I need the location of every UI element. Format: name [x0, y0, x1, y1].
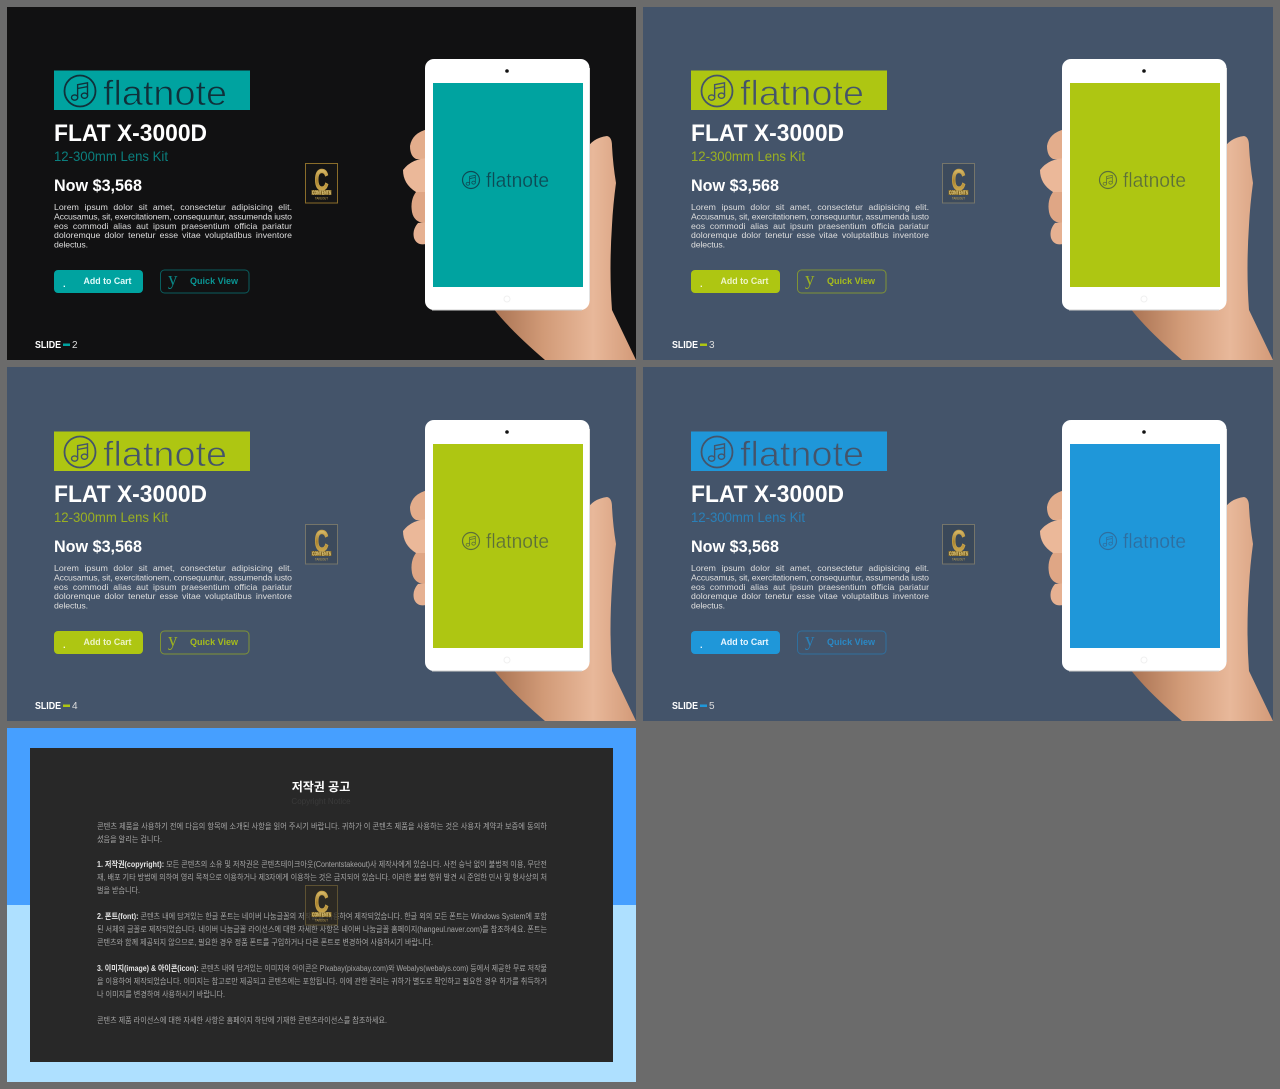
logo banner	[54, 70, 250, 113]
description: Lorem ipsum dolor sit amet, consectetur adipisicing elit.	[54, 202, 292, 212]
content badge overlay	[306, 886, 338, 925]
description	[691, 563, 929, 611]
quick view button: y	[168, 269, 178, 290]
add to cart button	[54, 631, 143, 654]
quick view button: y	[805, 630, 815, 651]
description: doloremque dolor tenetur esse vitae voluptatibus inventore	[691, 591, 929, 601]
product title: FLAT X-3000D	[54, 120, 207, 147]
font paragraph: 2. 폰트(font): 콘텐츠 내에 담겨있는 한글 폰트는 네이버 나눔글꼴의 저작물을 사용하여 제작되었습니다. 한글 외의 모든 폰트는 Windows System에 포함	[97, 911, 548, 921]
slide number	[35, 701, 78, 712]
price: Now $3,568	[54, 537, 142, 556]
quick view button: y	[168, 630, 178, 651]
content badge	[306, 524, 338, 564]
price: Now $3,568	[691, 537, 779, 556]
quick view button	[798, 269, 886, 293]
slide background	[7, 7, 636, 360]
product title: FLAT X-3000D	[691, 120, 844, 147]
slide number: 3	[709, 340, 715, 351]
add to cart button: Add to Cart	[720, 276, 769, 287]
content badge	[306, 164, 338, 203]
intro paragraph: 셨음을 알리는 겁니다.	[97, 834, 162, 844]
intro paragraph: 콘텐츠 제품을 사용하기 전에 다음의 항목에 소개된 사항을 읽어 주시기 바랍니다. 귀하가 이 콘텐츠 제품을 사용하는 것은 사용자 계약과 보증에 동의하	[97, 821, 548, 831]
image and icon paragraph: 나 이미지를 변경하여 사용하시기 바랍니다.	[97, 989, 225, 999]
copyright paragraph: 1. 저작권(copyright): 모든 콘텐츠의 소유 및 저작권은 콘텐츠테이크아웃(Contentstakeout)사 제작사에게 있습니다. 사전 승낙 없이 불법적 이용, 무단전	[97, 859, 547, 869]
description: delectus.	[691, 601, 725, 611]
add to cart button: Add to Cart	[84, 637, 132, 648]
slide number: 4	[72, 701, 78, 712]
image and icon paragraph	[97, 963, 547, 999]
light blue background lower	[7, 905, 636, 1082]
font paragraph	[97, 911, 548, 947]
add to cart button	[691, 631, 780, 654]
copyright paragraph: 벌을 받습니다.	[97, 885, 140, 895]
description	[54, 563, 292, 611]
slide number	[672, 340, 715, 351]
description	[54, 202, 292, 250]
add to cart button	[54, 270, 143, 293]
tablet screen	[433, 83, 583, 287]
quick view button: Quick View	[190, 637, 239, 648]
slide background	[7, 367, 636, 721]
slide number: SLIDE	[672, 340, 698, 351]
hand holding tablet	[403, 59, 636, 360]
add to cart button: .	[700, 279, 703, 290]
logo banner: flatnote	[740, 74, 864, 113]
screen logo: flatnote	[1123, 170, 1186, 192]
slide number: SLIDE	[35, 701, 61, 712]
license paragraph: 콘텐츠 제품 라이선스에 대한 자세한 사항은 홈페이지 하단에 기재한 콘텐츠라이선스를 참조하세요.	[97, 1015, 387, 1025]
hand holding tablet	[1040, 59, 1273, 360]
screen logo: flatnote	[486, 531, 549, 553]
notice subheading: Copyright Notice	[291, 797, 351, 806]
add to cart button: .	[63, 640, 66, 651]
description: Accusamus, sit, exercitationem, consequuntur, assumenda iusto	[54, 572, 292, 582]
logo banner	[691, 432, 887, 474]
slide number	[672, 701, 715, 712]
slide background	[643, 367, 1273, 721]
description: delectus.	[54, 240, 88, 250]
description: eos commodi alias aut ipsum praesentium officia pariatur	[691, 582, 929, 592]
description: doloremque dolor tenetur esse vitae voluptatibus inventore	[54, 230, 292, 240]
lens kit subtitle: 12-300mm Lens Kit	[691, 148, 805, 164]
description: Lorem ipsum dolor sit amet, consectetur adipisicing elit.	[54, 563, 292, 573]
lens kit subtitle: 12-300mm Lens Kit	[691, 509, 805, 525]
description: doloremque dolor tenetur esse vitae voluptatibus inventore	[54, 591, 292, 601]
logo banner: flatnote	[103, 74, 227, 113]
panel: copyright notice slide	[7, 728, 636, 1082]
quick view button	[798, 630, 886, 654]
copyright paragraph	[97, 859, 547, 895]
copyright paragraph: 재, 배포 기타 방법에 의하여 영리 목적으로 이용하거나 제3자에게 이용하는 것은 금지되어 있습니다. 이러한 불법 행위 발견 시 준엄한 민사 및 형사상의 처	[97, 872, 547, 882]
intro paragraph	[97, 821, 548, 844]
description: eos commodi alias aut ipsum praesentium officia pariatur	[54, 582, 292, 592]
panel: slide 4 lime on slate	[7, 367, 636, 721]
product title: FLAT X-3000D	[54, 481, 207, 508]
quick view button	[160, 630, 249, 654]
font paragraph: 된 서체의 글꼴로 제작되었습니다. 네이버 나눔글꼴 라이선스에 대한 자세한 사항은 네이버 나눔글꼴 홈페이지(hangeul.naver.com)를 참조하세요. 폰트는	[97, 924, 547, 934]
tablet screen	[1070, 444, 1220, 648]
price: Now $3,568	[54, 176, 142, 195]
add to cart button: Add to Cart	[84, 276, 132, 287]
description: Accusamus, sit, exercitationem, consequuntur, assumenda iusto	[691, 572, 929, 582]
quick view button: y	[805, 269, 815, 290]
logo banner: flatnote	[103, 435, 227, 474]
hand holding tablet	[403, 420, 636, 721]
slide number	[35, 340, 78, 351]
lens kit subtitle: 12-300mm Lens Kit	[54, 148, 168, 164]
logo banner: flatnote	[740, 435, 864, 474]
logo banner	[54, 432, 250, 474]
description: delectus.	[691, 240, 725, 250]
tablet screen	[1070, 83, 1220, 287]
panel: slide 3 lime on slate	[643, 7, 1273, 360]
slide number: SLIDE	[672, 701, 698, 712]
price: Now $3,568	[691, 176, 779, 195]
description: eos commodi alias aut ipsum praesentium officia pariatur	[691, 221, 929, 231]
quick view button: Quick View	[827, 276, 876, 287]
description: Accusamus, sit, exercitationem, consequuntur, assumenda iusto	[691, 211, 929, 221]
panel: slide 2 teal on black	[7, 7, 636, 360]
lens kit subtitle: 12-300mm Lens Kit	[54, 509, 168, 525]
font paragraph: 콘텐츠와 함께 제공되지 않으므로, 필요한 경우 정품 폰트를 구입하거나 다른 폰트로 변경하여 사용하시기 바랍니다.	[97, 937, 433, 947]
add to cart button: .	[63, 279, 66, 290]
add to cart button: .	[700, 640, 703, 651]
quick view button: Quick View	[190, 276, 239, 287]
notice heading: 저작권 공고	[292, 779, 350, 794]
description: doloremque dolor tenetur esse vitae voluptatibus inventore	[691, 230, 929, 240]
quick view button	[160, 269, 249, 293]
description: eos commodi alias aut ipsum praesentium officia pariatur	[54, 221, 292, 231]
add to cart button: Add to Cart	[720, 637, 769, 648]
tablet screen	[433, 444, 583, 648]
hand holding tablet	[1040, 420, 1273, 721]
quick view button: Quick View	[827, 637, 876, 648]
content badge	[942, 524, 974, 564]
dark notice card	[30, 748, 613, 1062]
description: Accusamus, sit, exercitationem, consequuntur, assumenda iusto	[54, 211, 292, 221]
image and icon paragraph: 을 이용하여 제작되었습니다. 이미지는 참고로만 제공되고 콘텐츠에는 포함됩니다. 이에 관한 권리는 귀하가 별도로 확인하고 필요한 경우 허가를 취득하거	[97, 976, 547, 986]
slide background	[643, 7, 1273, 360]
slide number: 5	[709, 701, 715, 712]
logo banner	[691, 70, 887, 113]
slide number: 2	[72, 340, 78, 351]
description: delectus.	[54, 601, 88, 611]
panel: slide 5 blue on slate	[643, 367, 1273, 721]
add to cart button	[691, 270, 780, 293]
description: Lorem ipsum dolor sit amet, consectetur adipisicing elit.	[691, 202, 929, 212]
blue background upper	[7, 728, 636, 905]
image and icon paragraph: 3. 이미지(image) & 아이콘(icon): 콘텐츠 내에 담겨있는 이미지와 아이콘은 Pixabay(pixabay.com)와 Webalys(webalys.com) 등에서 제공한 무료 저작물	[97, 963, 547, 973]
screen logo: flatnote	[486, 170, 549, 192]
description: Lorem ipsum dolor sit amet, consectetur adipisicing elit.	[691, 563, 929, 573]
content badge	[942, 164, 974, 203]
slide number: SLIDE	[35, 340, 61, 351]
screen logo: flatnote	[1123, 531, 1186, 553]
description	[691, 202, 929, 250]
product title: FLAT X-3000D	[691, 481, 844, 508]
